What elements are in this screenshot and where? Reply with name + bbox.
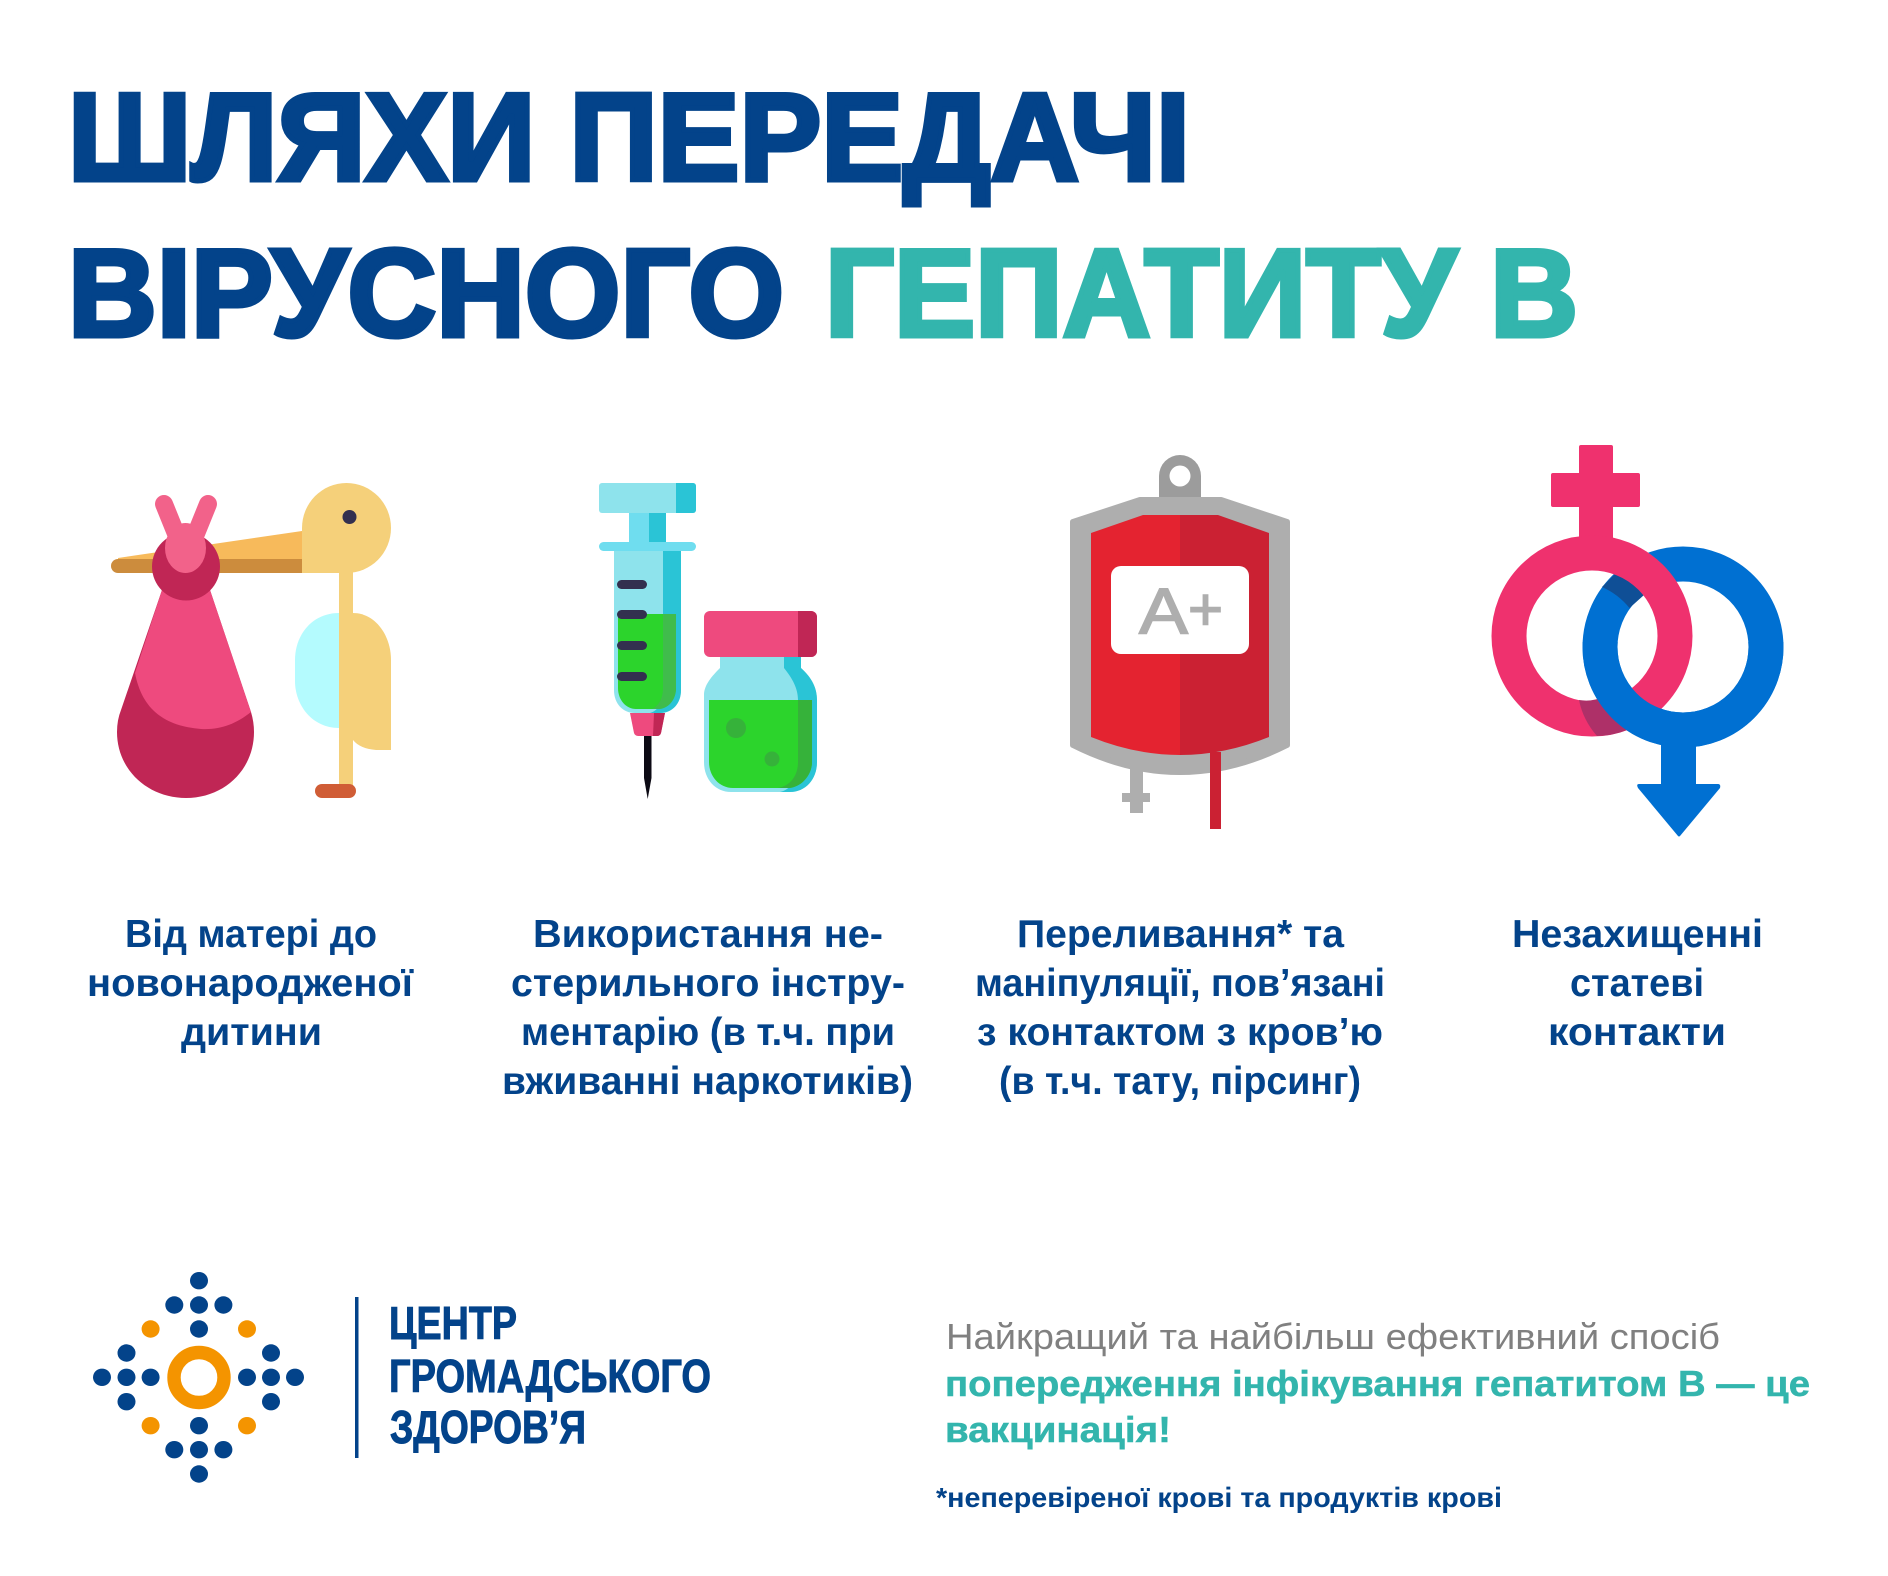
vaccination message: Найкращий та найбільш ефективний спосіб [946, 1316, 1720, 1357]
title: ГЕПАТИТУ В [825, 225, 1578, 363]
label: transfusion and blood contact [975, 913, 1385, 1103]
label: transfusion and blood contact: Переливання* та [1017, 913, 1344, 956]
label: non-sterile instruments [502, 913, 913, 1103]
footnote: *неперевіреної крові та продуктів крові [936, 1482, 1502, 1513]
label: blood type A+ [1111, 566, 1249, 654]
title [68, 69, 1578, 363]
icon: syringe and vial [599, 483, 817, 799]
label: non-sterile instruments: стерильного інстру- [511, 962, 905, 1005]
icon: gender symbols interlinked [1509, 445, 1766, 836]
label: blood type A+: + [1188, 576, 1223, 643]
vaccination message [945, 1316, 1810, 1450]
label: from mother to newborn: Від матері до [125, 913, 377, 956]
label: unprotected sexual contact: статеві [1570, 962, 1704, 1005]
title: ШЛЯХИ ПЕРЕДАЧІ [68, 69, 1190, 207]
label: blood type A+: A [1139, 574, 1189, 648]
label: non-sterile instruments: ментарію (в т.ч. при [521, 1011, 895, 1054]
label: transfusion and blood contact: з контактом з кров’ю [977, 1011, 1383, 1054]
label: from mother to newborn [87, 913, 414, 1054]
label: unprotected sexual contact: Незахищенні [1512, 913, 1763, 956]
vaccination message: вакцинація! [945, 1409, 1171, 1450]
label: transfusion and blood contact: маніпуляції, пов’язані [975, 962, 1385, 1005]
label: non-sterile instruments: вживанні наркотиків) [502, 1060, 913, 1103]
icon: blood bag [1073, 455, 1287, 829]
logo wordmark: ЦЕНТР [389, 1297, 517, 1349]
title: ВІРУСНОГО [68, 225, 784, 363]
logo mark: dots and ring [93, 1272, 304, 1483]
label: unprotected sexual contact [1512, 913, 1763, 1054]
icon: stork carrying baby bundle [111, 483, 391, 798]
label: transfusion and blood contact: (в т.ч. тату, пірсинг) [999, 1060, 1361, 1103]
vaccination message: попередження інфікування гепатитом В — це [945, 1363, 1810, 1404]
logo wordmark: ГРОМАДСЬКОГО [389, 1350, 711, 1402]
label: non-sterile instruments: Використання не- [533, 913, 883, 956]
logo wordmark: ЗДОРОВ’Я [390, 1401, 586, 1453]
label: unprotected sexual contact: контакти [1548, 1011, 1726, 1054]
label: from mother to newborn: дитини [181, 1011, 322, 1054]
label: from mother to newborn: новонародженої [87, 962, 414, 1005]
logo wordmark [389, 1297, 711, 1453]
